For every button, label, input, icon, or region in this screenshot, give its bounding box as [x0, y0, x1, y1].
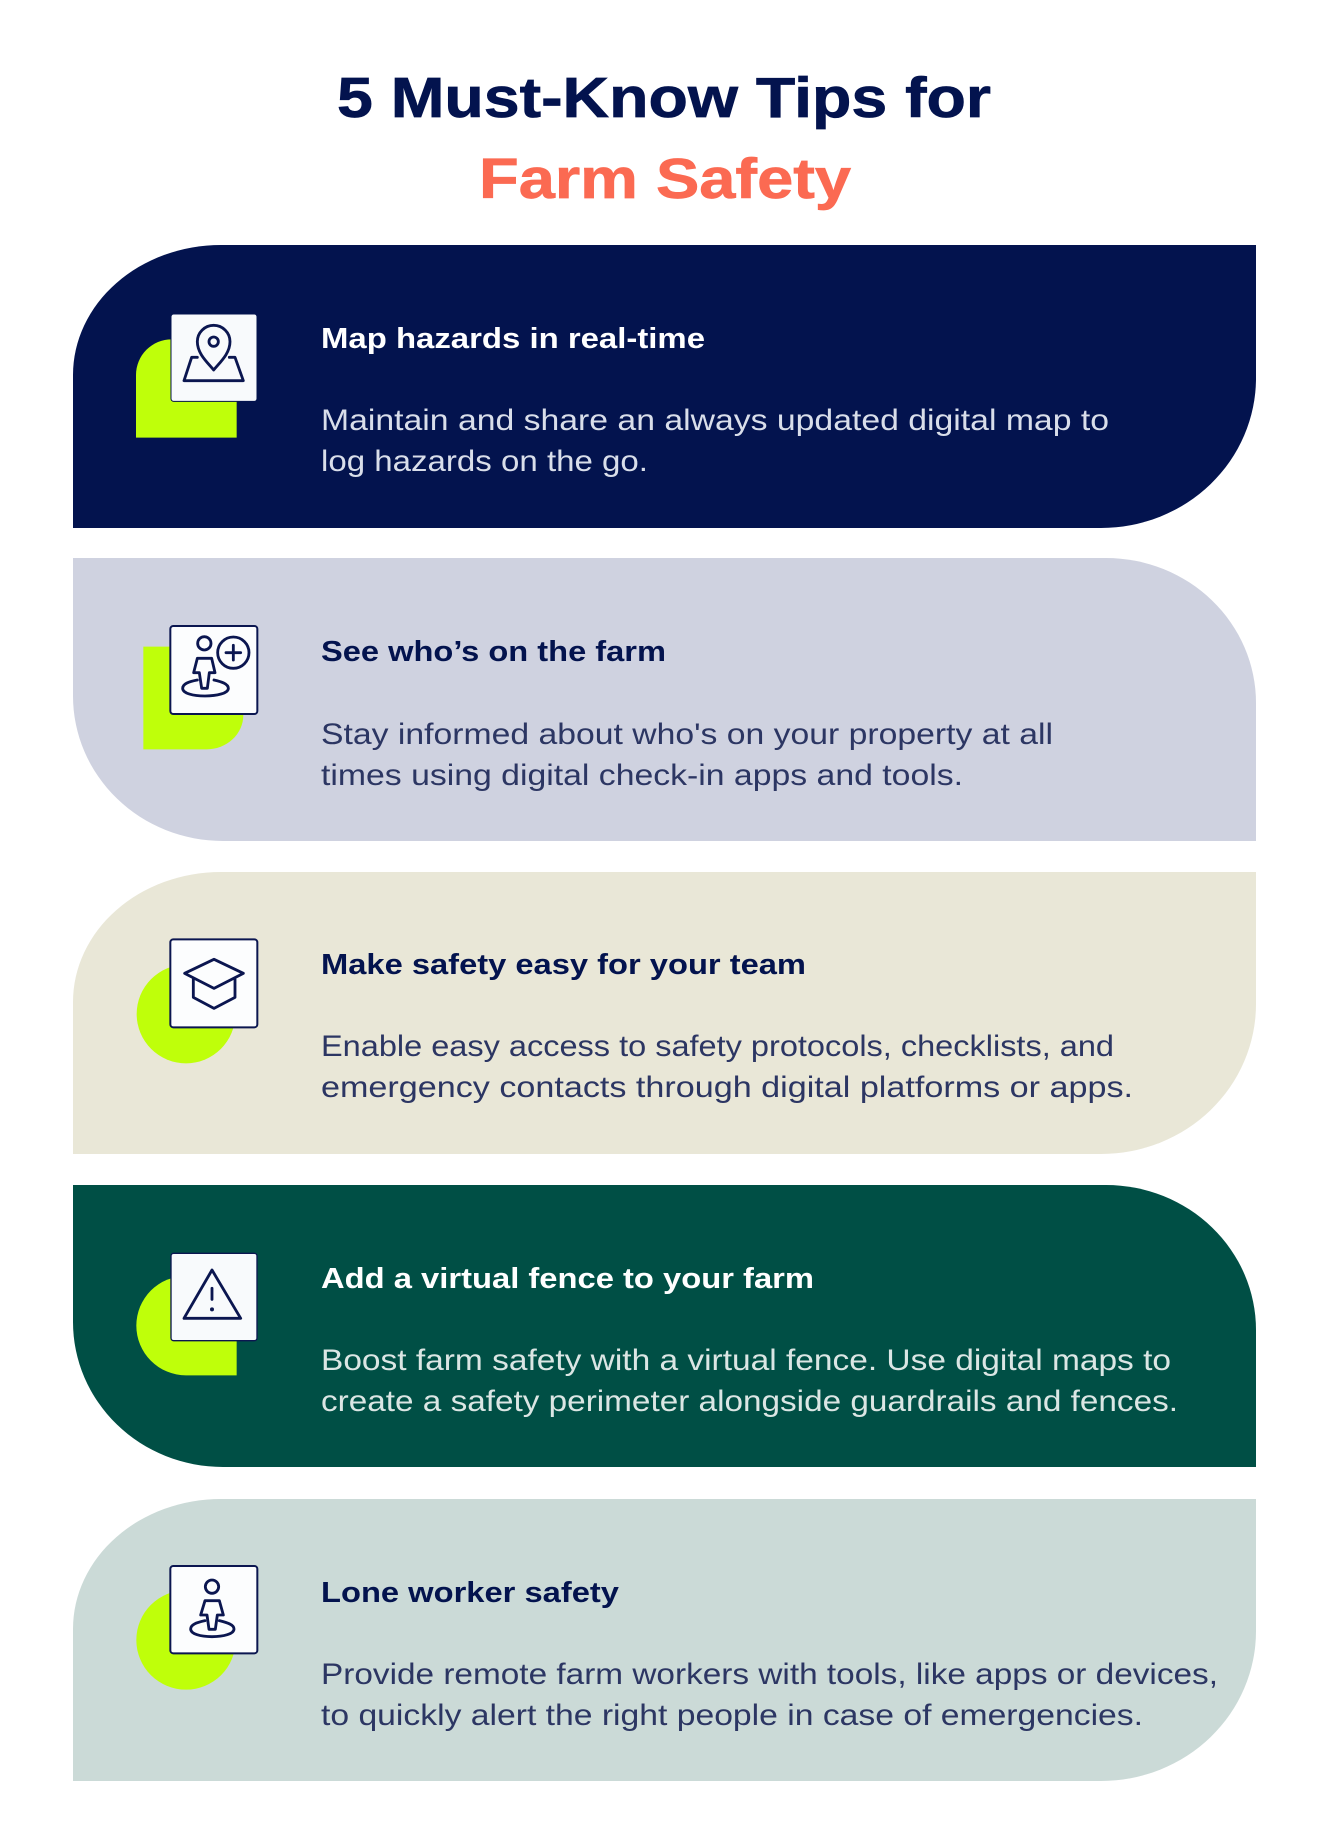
body: virtual fence: create a safety perimeter alongside guardrails and fences. — [321, 1385, 1178, 1418]
heading: lone worker safety: Lone worker safety — [321, 1577, 619, 1609]
body: map hazards: log hazards on the go. — [321, 445, 648, 478]
body: map hazards — [321, 404, 1109, 478]
heading: map hazards: Map hazards in real-time — [321, 323, 705, 355]
heading: make safety easy: Make safety easy for your team — [321, 949, 806, 981]
body: make safety easy — [321, 1030, 1133, 1104]
body: lone worker safety — [321, 1658, 1218, 1732]
body: virtual fence — [321, 1344, 1178, 1418]
panel: see who's on the farm — [73, 558, 1256, 841]
title: Farm Safety — [479, 147, 851, 211]
body: see who's on the farm: times using digital check-in apps and tools. — [321, 759, 963, 792]
panel: lone worker safety — [73, 1499, 1256, 1781]
body: map hazards: Maintain and share an always updated digital map to — [321, 404, 1109, 437]
panel: make safety easy — [73, 872, 1256, 1154]
heading: see who's on the farm: See who’s on the farm — [321, 636, 666, 668]
panel: virtual fence — [73, 1185, 1256, 1467]
body: see who's on the farm — [321, 718, 1053, 792]
icon: map pin — [136, 314, 257, 438]
panel: map hazards — [73, 245, 1256, 528]
body: see who's on the farm: Stay informed about who's on your property at all — [321, 718, 1053, 751]
title — [337, 66, 991, 211]
body: make safety easy: Enable easy access to safety protocols, checklists, and — [321, 1030, 1114, 1063]
body: virtual fence: Boost farm safety with a virtual fence. Use digital maps to — [321, 1344, 1171, 1377]
body: make safety easy: emergency contacts through digital platforms or apps. — [321, 1071, 1133, 1104]
heading: virtual fence: Add a virtual fence to your farm — [321, 1263, 814, 1295]
icon: person with plus — [143, 626, 257, 749]
body: lone worker safety: Provide remote farm workers with tools, like apps or devices, — [321, 1658, 1218, 1691]
title: 5 Must-Know Tips for — [337, 66, 991, 130]
icon: lone person — [136, 1566, 257, 1690]
body: lone worker safety: to quickly alert the right people in case of emergencies. — [321, 1699, 1143, 1732]
icon: graduation cap — [137, 939, 257, 1063]
icon: warning triangle — [136, 1253, 257, 1375]
